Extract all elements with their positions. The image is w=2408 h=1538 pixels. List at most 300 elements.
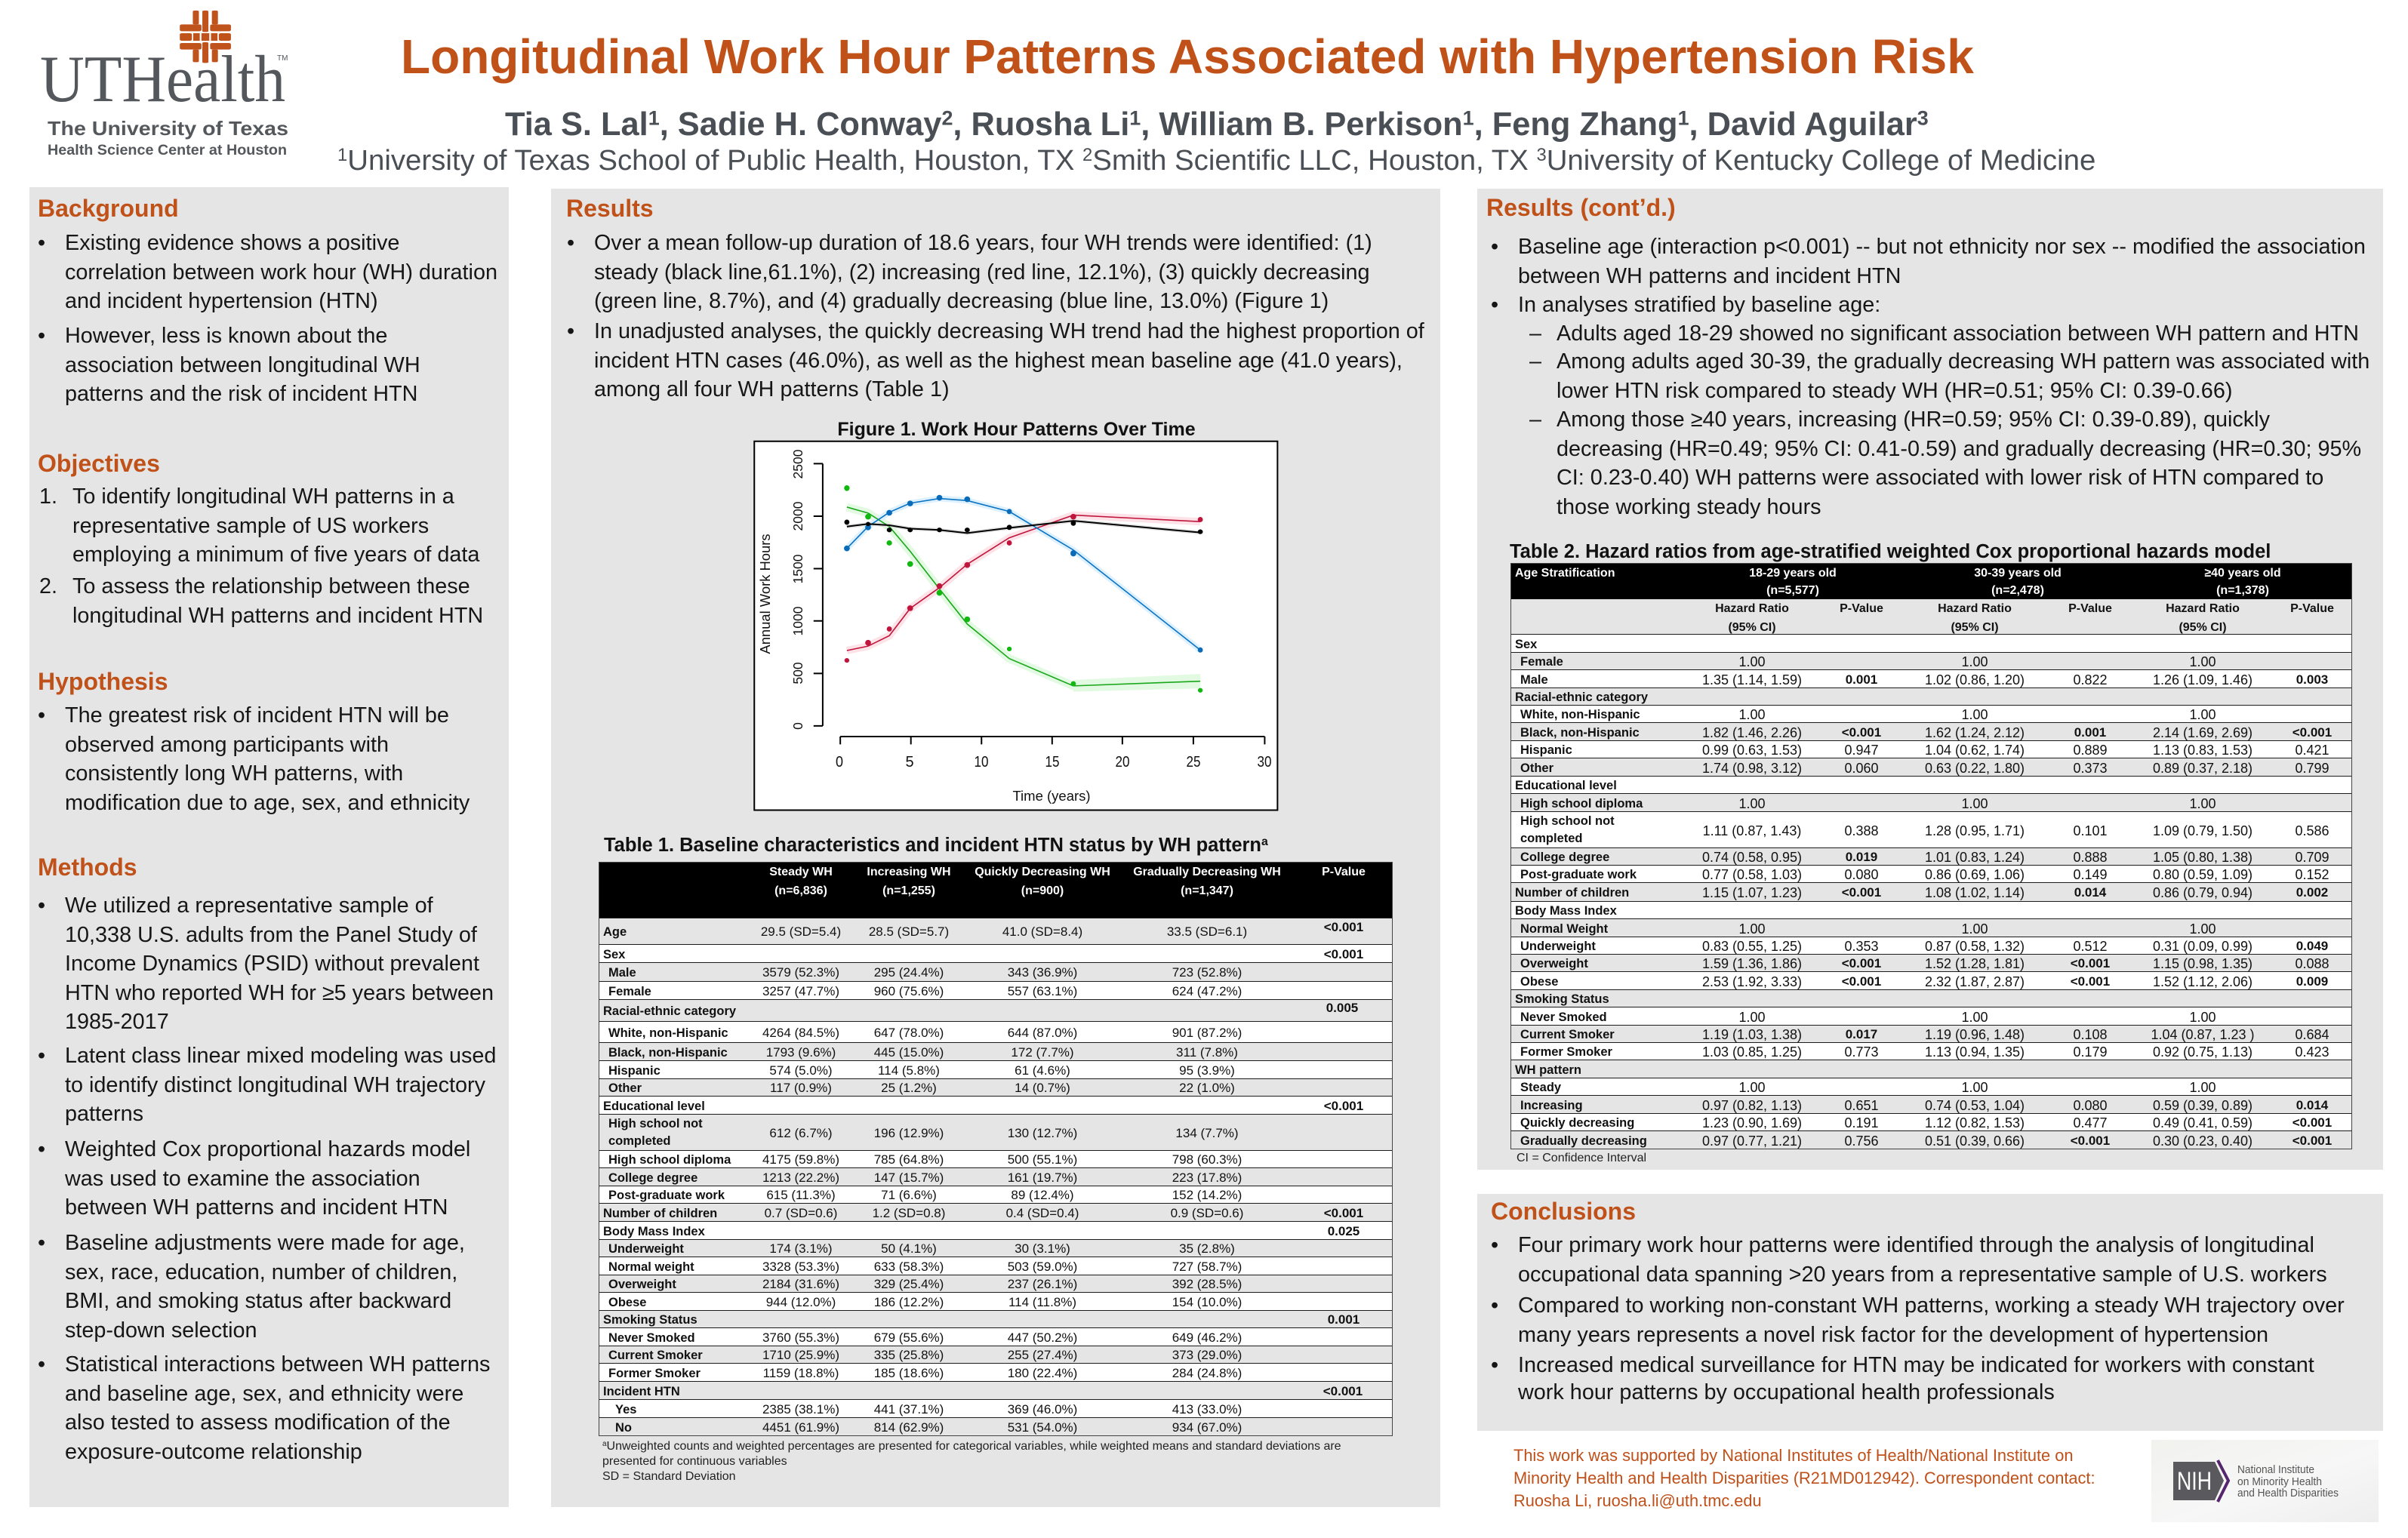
panel: middle column (551, 189, 1440, 1507)
table 2: hazard ratios: 0.888 (2073, 850, 2108, 865)
table 1: baseline characteristics: 284 (24.8%) (1172, 1366, 1242, 1380)
table 1: baseline characteristics: Hispanic (608, 1064, 661, 1078)
table 2: hazard ratios: 1.00 (1961, 1080, 1988, 1095)
table 2: hazard ratios: 0.709 (2295, 850, 2329, 865)
x tick labels: 15 (1045, 754, 1060, 771)
table 2: hazard ratios: 1.00 (2189, 707, 2216, 722)
table 1: baseline characteristics: 117 (0.9%) (770, 1081, 832, 1095)
table 1: baseline characteristics (599, 862, 1393, 1436)
table 2: hazard ratios: 0.149 (2073, 867, 2108, 882)
table 2: hazard ratios: 0.353 (1844, 939, 1879, 954)
text: – (1529, 408, 1541, 432)
table 2: hazard ratios: 0.97 (0.82, 1.13) (1702, 1097, 1802, 1112)
text: conclusion bullet 2 (1491, 1293, 2345, 1346)
table 2: hazard ratios: 1.28 (0.95, 1.71) (1925, 823, 2025, 838)
panel: right column results (1477, 189, 2383, 1170)
y tick labels: 2000 (790, 501, 805, 531)
panel: left column (29, 187, 509, 1507)
table 1: baseline characteristics: 0.9 (SD=0.6) (1171, 1206, 1243, 1220)
text: • (38, 1137, 45, 1161)
table 2: hazard ratios: Hispanic (1520, 743, 1572, 757)
table 2: hazard ratios: 1.00 (2189, 921, 2216, 936)
table 1: baseline characteristics: 22 (1.0%) (1179, 1081, 1235, 1095)
table 2: hazard ratios: WH pattern (1515, 1063, 1581, 1076)
table 1: baseline characteristics: Male (608, 966, 636, 980)
table 2: hazard ratios: 0.80 (0.59, 1.09) (2153, 867, 2252, 882)
table 2: hazard ratios: 2.53 (1.92, 3.33) (1702, 974, 1802, 989)
table 2: hazard ratios: 0.002 (2296, 885, 2328, 900)
table 2: hazard ratios: 0.822 (2073, 672, 2108, 687)
table 1: baseline characteristics: 2184 (31.6%) (762, 1277, 839, 1291)
table 2: hazard ratios: 1.62 (1.24, 2.12) (1925, 724, 2025, 740)
table 1: baseline characteristics: Smoking Status (603, 1313, 697, 1327)
table 1: baseline characteristics: Quickly Decreasing WH (975, 866, 1110, 878)
text: hypothesis: consistently long WH patterns, with (65, 761, 403, 786)
logo: NIH National Institute on Minority Health and Health Disparities: National Institute (2237, 1464, 2314, 1476)
table 2: hazard ratios: 1.15 (1.07, 1.23) (1702, 885, 1802, 900)
table 2: hazard ratios: 0.373 (2073, 761, 2108, 776)
text: • (1491, 1233, 1498, 1257)
x tick labels (836, 754, 1271, 771)
text: background bullet 1: Existing evidence shows a positive (65, 231, 399, 255)
table 2: hazard ratios: Steady (1520, 1081, 1561, 1094)
table 1: baseline characteristics: Incident HTN (603, 1384, 680, 1398)
text: results continued bullet 2: In analyses stratified by baseline age: (1518, 293, 1880, 317)
table 1: baseline characteristics: 89 (12.4%) (1011, 1188, 1074, 1202)
text: methods bullet 1: 1985-2017 (65, 1010, 169, 1034)
table 2: hazard ratios: 1.00 (1961, 795, 1988, 811)
table 2: hazard ratios: 2.32 (1.87, 2.87) (1925, 974, 2025, 989)
heading: Background: Background (38, 195, 179, 222)
x tick labels: 20 (1116, 754, 1129, 771)
table 1: baseline characteristics: 445 (15.0%) (874, 1044, 944, 1060)
table 2: hazard ratios: P-Value (2068, 602, 2112, 615)
table 1: baseline characteristics: 960 (75.6%) (874, 984, 944, 998)
table 1: baseline characteristics: High school diploma (608, 1153, 731, 1167)
table 2: hazard ratios: 1.74 (0.98, 3.12) (1702, 761, 1802, 776)
table 1: baseline characteristics: 186 (12.2%) (874, 1295, 944, 1309)
text: – (1529, 321, 1541, 346)
x tick labels: 5 (905, 754, 914, 771)
table 2: hazard ratios: 0.947 (1844, 743, 1879, 758)
table 1: baseline characteristics: Racial-ethnic category (603, 1004, 736, 1018)
series: black steady (844, 519, 1202, 534)
table 2: hazard ratios: 0.001 (2074, 724, 2106, 740)
table 1: baseline characteristics: 727 (58.7%) (1172, 1259, 1242, 1274)
table 2: hazard ratios: Quickly decreasing (1520, 1116, 1634, 1130)
table 2: hazard ratios: 0.080 (2073, 1097, 2108, 1112)
y tick labels: 2500 (790, 449, 805, 478)
table 1: baseline characteristics: 633 (58.3%) (874, 1259, 944, 1274)
table 2: hazard ratios: 0.89 (0.37, 2.18) (2153, 761, 2252, 776)
text: hypothesis (38, 703, 470, 815)
table 2: hazard ratios: 0.30 (0.23, 0.40) (2153, 1134, 2252, 1149)
table 1: baseline characteristics: 624 (47.2%) (1172, 984, 1242, 998)
table 1: baseline characteristics: No (615, 1420, 632, 1434)
table 1 footnote: presented for continuous variables (602, 1455, 787, 1468)
table 2: hazard ratios: 1.00 (1738, 654, 1766, 669)
text: • (567, 319, 574, 343)
table 2: hazard ratios: 0.59 (0.39, 0.89) (2153, 1097, 2252, 1112)
text: results continued bullet 1: between WH patterns and incident HTN (1518, 264, 1901, 288)
text: background bullet 2: association between longitudinal WH (65, 353, 420, 377)
table 2: hazard ratios: 0.773 (1844, 1044, 1879, 1060)
text: sub-bullet 40 plus: decreasing (HR=0.49; 95% CI: 0.41-0.59) and gradually decreasing (HR=0.30; 95% (1557, 436, 2361, 460)
table 2: hazard ratios: Normal Weight (1520, 922, 1608, 936)
table 1: baseline characteristics: 95 (3.9%) (1179, 1063, 1235, 1078)
table 1: baseline characteristics: 798 (60.3%) (1172, 1152, 1242, 1167)
text: sub-bullet 30-39 (1529, 349, 2370, 403)
table 2: hazard ratios: 0.421 (2295, 743, 2329, 758)
table 2: hazard ratios: 1.09 (0.79, 1.50) (2153, 823, 2252, 838)
text: background bullet 2: However, less is known about the (65, 324, 387, 348)
table 1: baseline characteristics: 3257 (47.7%) (762, 984, 839, 998)
table 2: hazard ratios: 0.388 (1844, 823, 1879, 838)
text: hypothesis: observed among participants with (65, 732, 389, 756)
funding acknowledgement: Ruosha Li, ruosha.li@uth.tmc.edu (1513, 1491, 1762, 1510)
table 1: baseline characteristics: (n=900) (1021, 884, 1064, 897)
text: 2. (39, 574, 57, 598)
table 2: hazard ratios: Gradually decreasing (1520, 1134, 1647, 1147)
table 2: hazard ratios: <0.001 (2071, 956, 2110, 970)
table 2: hazard ratios: 1.00 (1961, 1010, 1988, 1025)
table 1: baseline characteristics: 50 (4.1%) (881, 1241, 937, 1256)
text: methods bullet 3: between WH patterns and incident HTN (65, 1195, 448, 1220)
table 1: baseline characteristics: 343 (36.9%) (1008, 965, 1077, 980)
table 1: baseline characteristics: Body Mass Index (603, 1224, 705, 1238)
table 2: hazard ratios (1510, 563, 2352, 1149)
table 1: baseline characteristics: 152 (14.2%) (1172, 1188, 1242, 1202)
table 1: baseline characteristics: 413 (33.0%) (1172, 1402, 1242, 1416)
table 1: baseline characteristics: <0.001 (1323, 1384, 1363, 1398)
table 2: hazard ratios: 0.019 (1846, 850, 1877, 864)
text: methods bullet 4: step-down selection (65, 1318, 257, 1342)
table 1: baseline characteristics: 3579 (52.3%) (762, 965, 839, 980)
table 1: baseline characteristics: 1.2 (SD=0.8) (873, 1206, 945, 1220)
text: sub-bullet 30-39: Among adults aged 30-39, the gradually decreasing WH pattern was associated with (1557, 349, 2370, 374)
table 1: baseline characteristics: Normal weight (608, 1260, 694, 1274)
confidence bands (847, 499, 1200, 691)
table 1: baseline characteristics: 0.7 (SD=0.6) (765, 1206, 837, 1220)
table 1: baseline characteristics: High school not (608, 1117, 703, 1130)
table 2: hazard ratios: 0.77 (0.58, 1.03) (1702, 867, 1802, 882)
table 1: baseline characteristics: 4264 (84.5%) (762, 1025, 839, 1040)
table 2: hazard ratios: Educational level (1515, 779, 1617, 792)
funding acknowledgement (1513, 1446, 2095, 1510)
text: methods bullet 3 (38, 1137, 470, 1220)
text: methods bullet 5: also tested to assess modification of the (65, 1410, 451, 1435)
table 2: hazard ratios: (95% CI) (2179, 621, 2227, 634)
table 1: baseline characteristics: White, non-Hispanic (608, 1026, 728, 1040)
table 1: baseline characteristics: 4175 (59.8%) (762, 1152, 839, 1167)
text: results continued bullet 1 (1491, 235, 2366, 288)
table 1: baseline characteristics: Increasing WH (867, 866, 951, 878)
text: methods bullet 1: 10,338 U.S. adults from the Panel Study of (65, 922, 477, 946)
table 2: hazard ratios: 1.00 (1738, 1010, 1766, 1025)
table 1: baseline characteristics: 180 (22.4%) (1008, 1366, 1077, 1380)
table 1: baseline characteristics: completed (608, 1134, 671, 1147)
logo: UTHealth: TM (277, 54, 288, 63)
text: conclusion bullet 1: Four primary work hour patterns were identified through the analysis of longitudinal (1518, 1233, 2314, 1257)
table 2: hazard ratios: 2.14 (1.69, 2.69) (2153, 724, 2252, 740)
text: conclusion bullet 3: Increased medical surveillance for HTN may be indicated for workers with constant (1518, 1353, 2314, 1377)
table 2: hazard ratios: 0.63 (0.22, 1.80) (1925, 761, 2025, 776)
logo: UTHealth: Health Science Center at Houston (48, 143, 287, 158)
table 2: hazard ratios: 0.49 (0.41, 0.59) (2153, 1115, 2252, 1130)
table 1: baseline characteristics: 311 (7.8%) (1176, 1044, 1238, 1060)
table 1: baseline characteristics: 25 (1.2%) (881, 1081, 937, 1095)
table 2: hazard ratios: 0.512 (2073, 939, 2108, 954)
table 1: baseline characteristics: 114 (11.8%) (1008, 1295, 1076, 1309)
text: sub-bullet 40 plus: CI: 0.23-0.40) WH patterns were associated with lower risk of HTN compared to (1557, 466, 2323, 490)
text: sub-bullet 30-39: lower HTN risk compared to steady WH (HR=0.51; 95% CI: 0.39-0.66) (1557, 379, 2232, 403)
table 1: baseline characteristics: 0.025 (1328, 1224, 1360, 1238)
table 2: hazard ratios: 1.04 (0.87, 1.23 ) (2151, 1027, 2255, 1042)
table 2: hazard ratios: Racial-ethnic category (1515, 691, 1648, 704)
table 1 footnote (602, 1440, 1341, 1483)
table 1: baseline characteristics: Post-graduate work (608, 1189, 725, 1202)
text: background bullet 1: and incident hypertension (HTN) (65, 289, 378, 313)
table 1: baseline characteristics: (n=6,836) (774, 884, 827, 897)
text: background bullet 1 (38, 231, 497, 313)
table 2: hazard ratios: Other (1520, 761, 1553, 774)
text: • (38, 1044, 45, 1068)
table 2: hazard ratios: 0.756 (1844, 1134, 1879, 1149)
table 2: hazard ratios: 0.191 (1844, 1115, 1879, 1130)
table 2: hazard ratios: Current Smoker (1520, 1028, 1615, 1041)
text: • (567, 231, 574, 255)
table 2: hazard ratios: 1.00 (1738, 921, 1766, 936)
table 1: baseline characteristics: 814 (62.9%) (874, 1420, 944, 1434)
table 2: hazard ratios: 18-29 years old (1749, 567, 1837, 580)
table 1: baseline characteristics: 944 (12.0%) (766, 1295, 836, 1309)
table 2: hazard ratios: (n=2,478) (1991, 584, 2044, 597)
table 2: hazard ratios: 1.19 (0.96, 1.48) (1925, 1027, 2025, 1042)
table 1: baseline characteristics: Never Smoked (608, 1331, 695, 1345)
text: results bullet 2: incident HTN cases (46.0%), as well as the highest mean baseline age (41.0 years), (594, 349, 1403, 373)
authors: Tia S. Lal1, Sadie H. Conway2, Ruosha Li1, William B. Perkison1, Feng Zhang1, David Aguilar3 (505, 106, 1929, 143)
x tick labels: 25 (1187, 754, 1200, 771)
table 1: baseline characteristics: Age (603, 925, 627, 939)
table 2: hazard ratios: 0.009 (2296, 974, 2328, 989)
table 2: hazard ratios: Smoking Status (1515, 992, 1609, 1006)
table 1: baseline characteristics: 3760 (55.3%) (762, 1330, 839, 1345)
table 2: hazard ratios: 0.97 (0.77, 1.21) (1702, 1134, 1802, 1149)
text: sub-bullet 40 plus: those working steady hours (1557, 495, 1821, 519)
table 2: hazard ratios: 1.13 (0.83, 1.53) (2153, 743, 2252, 758)
table 1: baseline characteristics: 223 (17.8%) (1172, 1170, 1242, 1185)
text: hypothesis: The greatest risk of incident HTN will be (65, 703, 449, 727)
table 2: hazard ratios: Post-graduate work (1520, 868, 1637, 881)
table 2: hazard ratios: 1.00 (2189, 1080, 2216, 1095)
x axis title: Time (years) (1012, 788, 1091, 804)
table 2: hazard ratios: 1.05 (0.80, 1.38) (2153, 850, 2252, 865)
table 2: hazard ratios: <0.001 (2293, 1115, 2332, 1130)
table 1: baseline characteristics: Black, non-Hispanic (608, 1046, 728, 1060)
table 2: hazard ratios: Female (1520, 655, 1563, 669)
table 2: hazard ratios: Age Stratification (1515, 567, 1615, 580)
table 2: hazard ratios: 1.00 (2189, 795, 2216, 811)
table 2: hazard ratios: 30-39 years old (1974, 567, 2062, 580)
text: results bullet 1: Over a mean follow-up duration of 18.6 years, four WH trends were identified: (1) (594, 231, 1372, 255)
table 1: baseline characteristics: 35 (2.8%) (1179, 1241, 1235, 1256)
table 2: hazard ratios: 0.86 (0.79, 0.94) (2153, 885, 2252, 900)
table 2: hazard ratios: Hazard Ratio (1715, 602, 1789, 615)
text: results bullet 1: steady (black line,61.1%), (2) increasing (red line, 12.1%), (3) quickly decreasing (594, 260, 1370, 284)
table 2: hazard ratios: 1.15 (0.98, 1.35) (2153, 956, 2252, 971)
table 1: baseline characteristics: <0.001 (1324, 1206, 1363, 1220)
text: • (1491, 1293, 1498, 1318)
text: methods bullet 1 (38, 894, 494, 1034)
series: blue gradually decreasing (844, 495, 1202, 653)
table 2: hazard ratios: P-Value (1840, 602, 1883, 615)
table 1: baseline characteristics: 335 (25.8%) (874, 1348, 944, 1362)
text: methods bullet 3: was used to examine the association (65, 1167, 420, 1191)
table 2: hazard ratios: 0.060 (1844, 761, 1879, 776)
table 2: hazard ratios: (95% CI) (1728, 621, 1776, 634)
text: methods bullet 2: to identify distinct longitudinal WH trajectory (65, 1073, 485, 1097)
table 2: hazard ratios: Sex (1515, 637, 1537, 651)
table 1: baseline characteristics: 147 (15.7%) (874, 1170, 944, 1185)
table 2: hazard ratios: 0.889 (2073, 743, 2108, 758)
text: conclusion bullet 3 (1491, 1353, 2314, 1404)
table 2: hazard ratios: Obese (1520, 975, 1558, 989)
figure title: Figure 1. Work Hour Patterns Over Time (837, 419, 1196, 440)
table 1: baseline characteristics: 447 (50.2%) (1008, 1330, 1077, 1345)
logo: UTHealth: The University of Texas (48, 117, 288, 140)
text: background bullet 1: correlation between work hour (WH) duration (65, 260, 497, 284)
text: methods bullet 1: We utilized a representative sample of (65, 894, 433, 918)
table 1: baseline characteristics: 174 (3.1%) (769, 1241, 833, 1256)
table 1: baseline characteristics: 14 (0.7%) (1015, 1081, 1070, 1095)
table 2: hazard ratios: 1.00 (1738, 707, 1766, 722)
table 1: baseline characteristics: 30 (3.1%) (1015, 1241, 1070, 1256)
text: objective 1: To identify longitudinal WH patterns in a (72, 484, 454, 509)
table 2: hazard ratios: 0.83 (0.55, 1.25) (1702, 939, 1802, 954)
x axis (840, 737, 1264, 744)
table 2: hazard ratios: 0.477 (2073, 1115, 2108, 1130)
table 2: hazard ratios: 0.017 (1846, 1027, 1877, 1041)
y tick labels: 1000 (790, 606, 805, 635)
table 1: baseline characteristics: 1213 (22.2%) (762, 1170, 839, 1185)
text: conclusion bullet 2: Compared to working non-constant WH patterns, working a steady WH trajectory over (1518, 1293, 2345, 1318)
text: sub-bullet 40 plus: Among those ≥40 years, increasing (HR=0.59; 95% CI: 0.39-0.89), quickly (1557, 408, 2270, 432)
table 2: hazard ratios: 0.049 (2296, 939, 2328, 953)
table 2: hazard ratios: <0.001 (2293, 724, 2332, 740)
table 1: baseline characteristics: Underweight (608, 1242, 684, 1256)
x tick labels: 30 (1258, 754, 1271, 771)
table 1: baseline characteristics: <0.001 (1324, 946, 1363, 961)
text: results bullet 2: among all four WH patterns (Table 1) (594, 377, 950, 401)
table 1: baseline characteristics: 392 (28.5%) (1172, 1277, 1242, 1291)
table 2: hazard ratios: 1.03 (0.85, 1.25) (1702, 1044, 1802, 1060)
table 1: baseline characteristics: 1159 (18.8%) (763, 1366, 839, 1380)
table 2: hazard ratios: 1.00 (1738, 795, 1766, 811)
text: results continued bullet 1: Baseline age (interaction p<0.001) -- but not ethnicity nor sex -- modified the association (1518, 235, 2366, 259)
text: sub-bullet 18-29: Adults aged 18-29 showed no significant association between WH pattern and HTN (1557, 321, 2359, 346)
table 1 title: Table 1. Baseline characteristics and incident HTN status by WH patterna (604, 835, 1268, 856)
table 1: baseline characteristics: P-Value (1322, 866, 1366, 878)
text: • (1491, 293, 1498, 317)
table 2: hazard ratios: <0.001 (2293, 1134, 2332, 1147)
text: • (38, 1352, 45, 1377)
table 2: hazard ratios: 0.651 (1844, 1097, 1879, 1112)
table 2: hazard ratios: 1.00 (2189, 1010, 2216, 1025)
table 1: baseline characteristics: Educational level (603, 1099, 705, 1112)
table 2: hazard ratios: 0.179 (2073, 1044, 2108, 1060)
table 1: baseline characteristics: 41.0 (SD=8.4) (1002, 924, 1082, 939)
table 1: baseline characteristics: 28.5 (SD=5.7) (869, 924, 949, 939)
table 1: baseline characteristics: 934 (67.0%) (1172, 1420, 1242, 1434)
table 2: hazard ratios: Body Mass Index (1515, 904, 1617, 918)
table 1: baseline characteristics: Other (608, 1081, 642, 1095)
table 2: hazard ratios: 0.152 (2295, 867, 2329, 882)
table 1: baseline characteristics: 2385 (38.1%) (762, 1402, 839, 1416)
text: methods bullet 3: Weighted Cox proportional hazards model (65, 1137, 470, 1161)
table 2: hazard ratios: (n=5,577) (1766, 584, 1819, 597)
affiliations: 1University of Texas School of Public Health, Houston, TX 2Smith Scientific LLC, Houston, TX 3University of Kentucky College of Medicine (337, 144, 2095, 177)
table 1: baseline characteristics: 134 (7.7%) (1175, 1126, 1239, 1140)
table 1: baseline characteristics: 723 (52.8%) (1172, 965, 1242, 980)
text: – (1529, 349, 1541, 374)
table 1: baseline characteristics: 154 (10.0%) (1172, 1295, 1242, 1309)
icon: orange woven cross (180, 11, 231, 63)
table 1: baseline characteristics: 196 (12.9%) (874, 1126, 944, 1140)
logo: NIH National Institute on Minority Health and Health Disparities (2151, 1440, 2379, 1522)
table 2: hazard ratios: 0.108 (2073, 1027, 2108, 1042)
table 1: baseline characteristics: 644 (87.0%) (1008, 1025, 1077, 1040)
table 1: baseline characteristics: 531 (54.0%) (1008, 1420, 1077, 1434)
table 2: hazard ratios: 1.35 (1.14, 1.59) (1702, 672, 1802, 687)
table 1: baseline characteristics: 373 (29.0%) (1172, 1348, 1242, 1362)
text: objective 1: representative sample of US workers (72, 513, 429, 537)
logo: NIH National Institute on Minority Health and Health Disparities: and Health Disparities (2237, 1487, 2339, 1500)
table 1: baseline characteristics: Sex (603, 948, 625, 961)
table 2: hazard ratios: Underweight (1520, 940, 1596, 953)
text: methods bullet 4: BMI, and smoking status after backward (65, 1289, 451, 1313)
table 2: hazard ratios: 1.52 (1.28, 1.81) (1925, 956, 2025, 971)
table 2: hazard ratios: 1.00 (1961, 654, 1988, 669)
table 2: hazard ratios: 0.92 (0.75, 1.13) (2153, 1044, 2252, 1060)
table 2: hazard ratios: (n=1,378) (2216, 584, 2269, 597)
table 2: hazard ratios: 0.101 (2073, 823, 2108, 838)
text: • (38, 703, 45, 727)
table 1: baseline characteristics: 61 (4.6%) (1015, 1063, 1070, 1078)
series: green quickly decreasing (844, 485, 1202, 693)
text: • (38, 1231, 45, 1255)
text: background bullet 2 (38, 324, 420, 406)
text: sub-bullet 40 plus (1529, 408, 2361, 519)
series: red increasing (845, 514, 1202, 663)
table 1: baseline characteristics: 557 (63.1%) (1008, 984, 1077, 998)
line chart: annual work hours over time (753, 441, 1279, 811)
table 2: hazard ratios: 0.31 (0.09, 0.99) (2153, 939, 2252, 954)
table 2: hazard ratios: 1.00 (2189, 654, 2216, 669)
table 2: hazard ratios: College degree (1520, 851, 1609, 864)
table 1: baseline characteristics: (n=1,255) (882, 884, 935, 897)
text: results bullet 2: In unadjusted analyses, the quickly decreasing WH trend had the highest proportion of (594, 319, 1424, 343)
table 2: hazard ratios: 0.99 (0.63, 1.53) (1702, 743, 1802, 758)
table 1: baseline characteristics: <0.001 (1324, 1099, 1363, 1112)
table 2: hazard ratios: <0.001 (2071, 974, 2110, 989)
logo: UTHealth (40, 11, 288, 158)
table 1: baseline characteristics: 612 (6.7%) (769, 1126, 833, 1140)
table 2: hazard ratios: High school diploma (1520, 797, 1643, 811)
table 1: baseline characteristics: 649 (46.2%) (1172, 1330, 1242, 1345)
table 1: baseline characteristics: 3328 (53.3%) (762, 1259, 839, 1274)
text: background bullet 2: patterns and the risk of incident HTN (65, 382, 417, 406)
table 1: baseline characteristics: 369 (46.0%) (1008, 1402, 1077, 1416)
